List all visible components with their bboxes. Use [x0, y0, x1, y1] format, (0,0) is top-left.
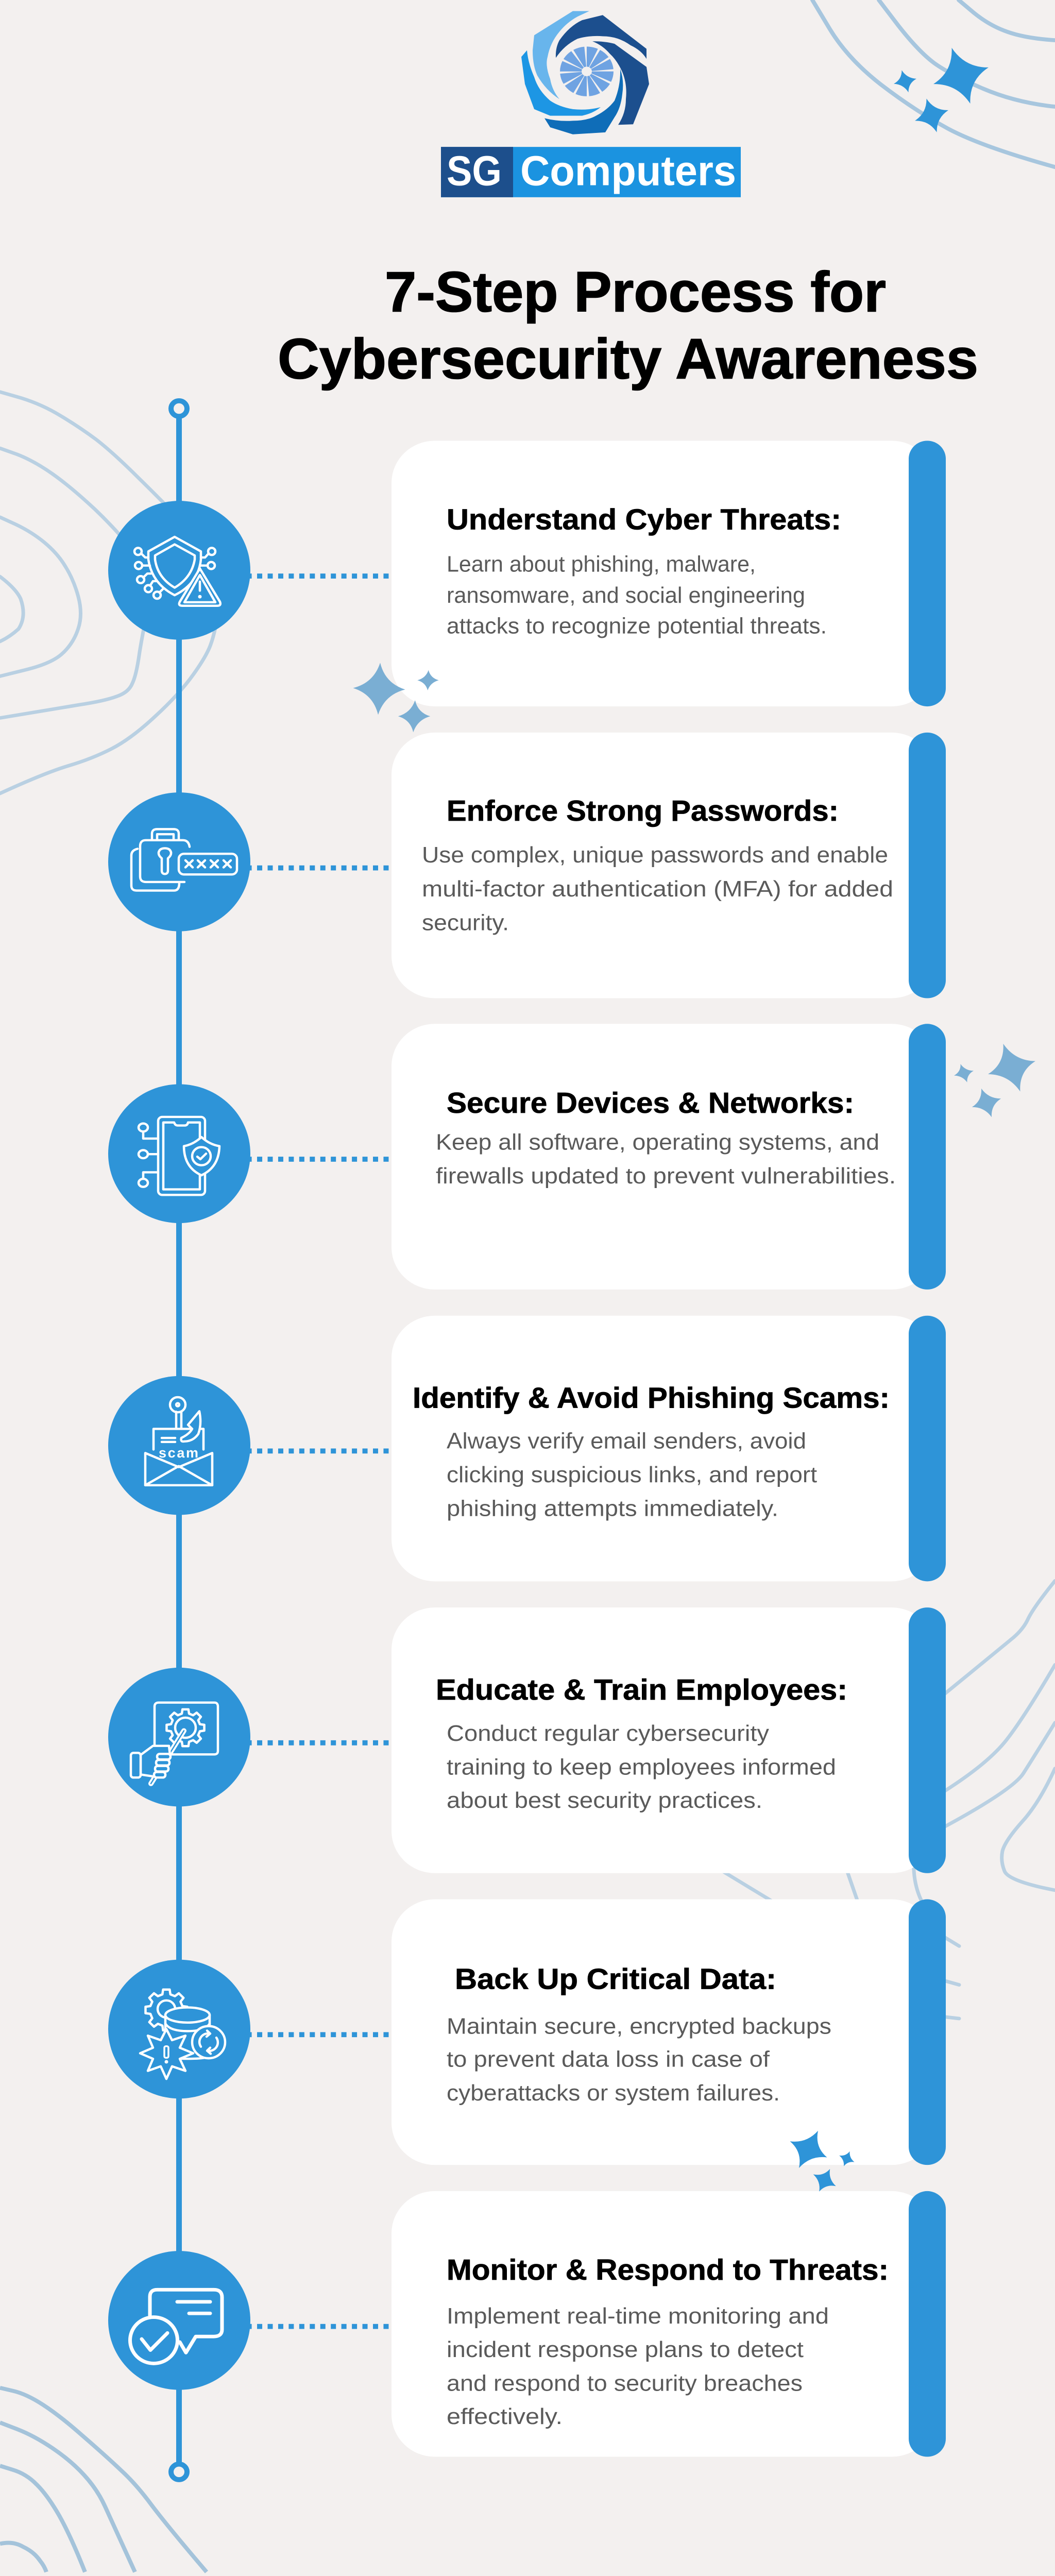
decoration: sparkle stars by first card — [352, 662, 439, 732]
title — [278, 260, 978, 391]
title: 7-Step Process for — [385, 260, 886, 324]
step 2 body: security. — [422, 910, 509, 936]
logo wordmark banner — [441, 147, 741, 197]
step 4 body: Always verify email senders, avoid — [447, 1429, 806, 1453]
step 6 heading: Back Up Critical Data: — [455, 1963, 776, 1995]
logo: SG Computers — [441, 11, 741, 197]
step 6 body — [447, 2014, 831, 2106]
step 7 body: Implement real-time monitoring and — [447, 2303, 829, 2329]
step 5 heading: Educate & Train Employees: — [436, 1673, 847, 1706]
panel: step 3 secure devices and networks — [392, 1024, 946, 1290]
step 3 body: Keep all software, operating systems, and — [436, 1130, 879, 1155]
step 2 body: multi-factor authentication (MFA) for added — [422, 877, 893, 902]
step 3 body: firewalls updated to prevent vulnerabilities. — [436, 1163, 896, 1189]
step 2 body — [422, 842, 893, 936]
step 5 body — [447, 1721, 836, 1813]
step 6 body: Maintain secure, encrypted backups — [447, 2014, 831, 2039]
icon: scam email with hook: scam — [159, 1445, 198, 1461]
panel: step 4 identify and avoid phishing scams — [392, 1316, 946, 1581]
decoration: sparkle stars top right — [890, 40, 998, 138]
step 1 heading: Understand Cyber Threats: — [447, 503, 841, 536]
step 1 body: attacks to recognize potential threats. — [447, 614, 827, 638]
panel: step 6 back up critical data — [392, 1900, 946, 2165]
icon: shield with warning triangle — [108, 501, 250, 640]
step 7 body: and respond to security breaches — [447, 2371, 803, 2396]
step 2 body: Use complex, unique passwords and enable — [422, 842, 888, 868]
panel: step 2 enforce strong passwords — [392, 733, 946, 998]
title: Cybersecurity Awareness — [278, 327, 978, 391]
icon: hand pressing gear on screen — [108, 1668, 250, 1806]
step 2 heading: Enforce Strong Passwords: — [447, 794, 839, 827]
panel: step 5 educate and train employees — [392, 1607, 946, 1873]
logo wordmark banner: SG — [447, 147, 502, 194]
step 7 body: effectively. — [447, 2404, 563, 2429]
step 1 body: ransomware, and social engineering — [447, 583, 805, 608]
icon: smartphone with shield — [108, 1084, 250, 1223]
icon: speech bubble with check badge — [108, 2251, 250, 2390]
step 1 body: Learn about phishing, malware, — [447, 552, 756, 577]
decoration: sparkle stars by third card — [951, 1037, 1044, 1122]
step 3 heading: Secure Devices & Networks: — [447, 1087, 854, 1120]
step 7 heading: Monitor & Respond to Threats: — [447, 2253, 889, 2286]
step 1 body — [447, 552, 827, 638]
step 6 body: cyberattacks or system failures. — [447, 2081, 780, 2106]
step 5 body: training to keep employees informed — [447, 1755, 836, 1780]
step 4 heading: Identify & Avoid Phishing Scams: — [413, 1382, 890, 1414]
logo swirl mark — [521, 11, 649, 134]
timeline spine with end rings — [171, 401, 187, 2480]
icon: padlock with password field — [108, 792, 250, 931]
step 4 body: phishing attempts immediately. — [447, 1496, 778, 1521]
panel: step 1 understand cyber threats — [392, 440, 946, 706]
logo wordmark banner: Computers — [520, 147, 736, 194]
icon: database with gear, burst and refresh — [108, 1960, 250, 2098]
step 5 body: about best security practices. — [447, 1788, 762, 1813]
step 6 body: to prevent data loss in case of — [447, 2047, 770, 2072]
step 4 body — [447, 1429, 818, 1521]
step 5 body: Conduct regular cybersecurity — [447, 1721, 770, 1746]
panel: step 7 monitor and respond to threats — [392, 2191, 946, 2457]
decoration: sparkle stars by sixth card — [780, 2123, 857, 2197]
step 4 body: clicking suspicious links, and report — [447, 1462, 818, 1487]
step 7 body — [447, 2303, 829, 2429]
step 3 body — [436, 1130, 896, 1189]
step 7 body: incident response plans to detect — [447, 2337, 804, 2362]
icon: scam email with hook — [108, 1376, 250, 1515]
